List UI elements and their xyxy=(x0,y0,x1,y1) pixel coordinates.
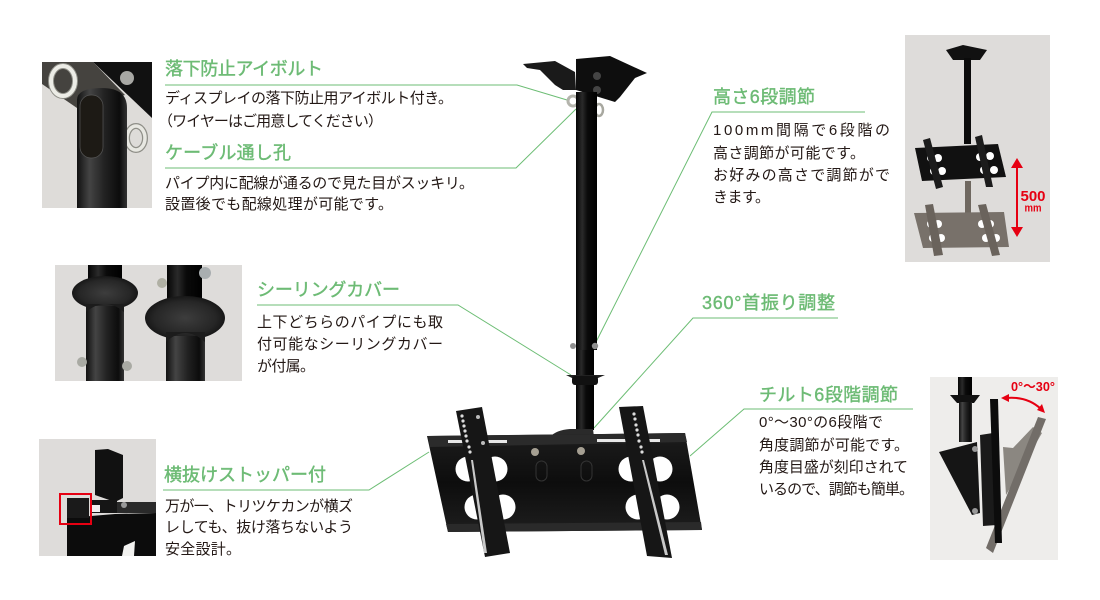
500 mm label: 500 xyxy=(1020,189,1046,205)
feature: ceiling cover xyxy=(257,280,443,375)
right vertical bar xyxy=(619,406,672,558)
feature: cable hole: 設置後でも配線処理が可能です。 xyxy=(165,196,393,213)
photo: lateral stopper xyxy=(39,439,156,556)
feature: height adjustment: お好みの高さで調節がで xyxy=(713,167,890,184)
feature: height adjustment: 高さ6段調節 xyxy=(713,87,815,107)
red curved arrow xyxy=(1001,394,1045,413)
feature: height adjustment xyxy=(713,87,890,206)
feature: eye bolt xyxy=(158,59,453,130)
feature: lateral stopper: レしても、抜け落ちないよう xyxy=(165,519,353,536)
angle label: 0°〜30° xyxy=(1011,379,1055,394)
photo: tilt adjustment xyxy=(930,377,1058,560)
left vertical bar xyxy=(456,407,510,557)
feature: height adjustment: 100mm間隔で6段階の xyxy=(713,122,890,139)
feature: 360 degree swivel: 360°首振り調整 xyxy=(702,293,835,313)
feature: height adjustment: 高さ調節が可能です。 xyxy=(713,145,865,162)
feature: cable hole: パイプ内に配線が通るので見た目がスッキリ。 xyxy=(165,175,474,192)
feature: cable hole: ケーブル通し孔 xyxy=(165,142,291,163)
leader lines xyxy=(163,85,913,490)
main product: ceiling mount xyxy=(427,56,702,558)
feature: ceiling cover: 付可能なシーリングカバー xyxy=(257,336,443,353)
telescopic pipe xyxy=(570,92,598,430)
ghost lower position xyxy=(914,181,1009,256)
feature: ceiling cover: シーリングカバー xyxy=(257,280,400,300)
feature: cable hole xyxy=(165,142,474,213)
mount upper position xyxy=(915,45,1006,189)
eye bolts xyxy=(568,96,603,116)
feature: lateral stopper: 万が一、トリツケカンが横ズ xyxy=(165,498,353,515)
photo: height adjustment xyxy=(905,35,1050,262)
feature: tilt adjustment: 0°〜30°の6段階で xyxy=(759,414,883,431)
500 mm label: mm xyxy=(1024,202,1042,214)
feature: eye bolt: ディスプレイの落下防止用アイボルト付き。 xyxy=(165,89,453,107)
feature: lateral stopper xyxy=(164,465,353,558)
red double arrow xyxy=(1011,158,1023,237)
feature: tilt adjustment: いるので、調節も簡単。 xyxy=(759,480,914,498)
feature: lateral stopper: 横抜けストッパー付 xyxy=(164,465,326,485)
feature: ceiling cover: 上下どちらのパイプにも取 xyxy=(257,314,443,331)
feature: tilt adjustment: 角度調節が可能です。 xyxy=(759,437,909,454)
feature: ceiling cover: が付属。 xyxy=(257,358,315,375)
ceiling cover xyxy=(566,375,605,385)
feature: eye bolt: 落下防止アイボルト xyxy=(165,59,323,79)
feature: height adjustment: きます。 xyxy=(713,189,770,206)
ghost tilted position xyxy=(986,417,1046,553)
red highlight box xyxy=(60,494,91,524)
feature: tilt adjustment: 角度目盛が刻印されて xyxy=(759,459,908,476)
feature: eye bolt: （ワイヤーはご用意してください） xyxy=(158,113,383,130)
feature: tilt adjustment xyxy=(759,385,914,498)
mounting plate xyxy=(427,433,702,532)
500 mm label xyxy=(1020,189,1046,214)
feature: tilt adjustment: チルト6段階調節 xyxy=(759,385,898,405)
photo: ceiling covers xyxy=(55,265,242,381)
swivel dome xyxy=(550,429,594,437)
photo: eye bolt and cable hole xyxy=(42,62,152,208)
ceiling bracket xyxy=(523,56,647,102)
feature: lateral stopper: 安全設計。 xyxy=(165,541,241,558)
